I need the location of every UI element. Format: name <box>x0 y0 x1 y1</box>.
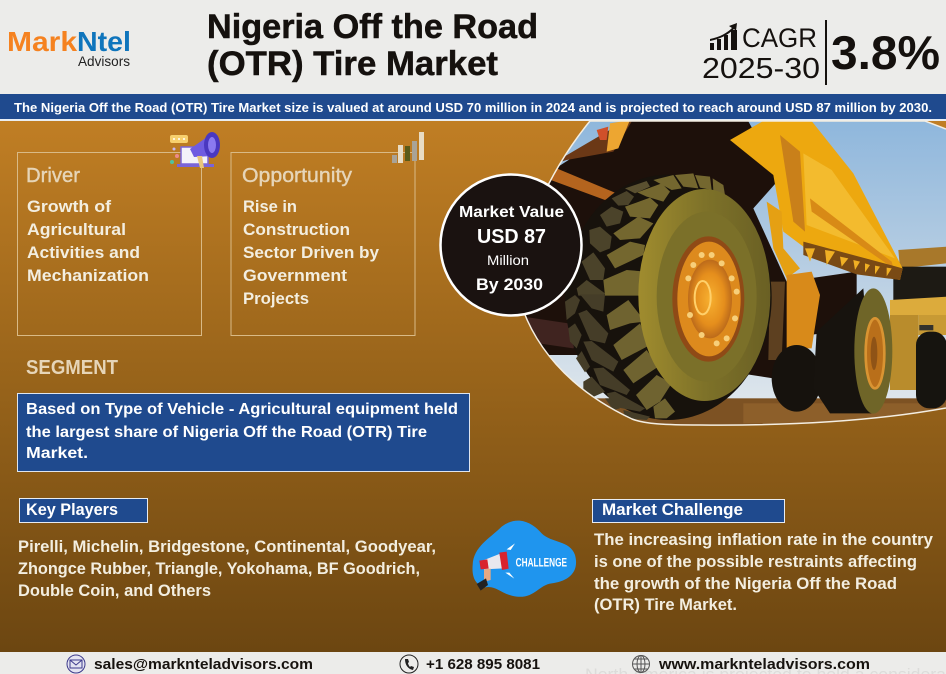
text: driver description: Activities and <box>27 243 140 262</box>
panel: driver <box>18 132 220 336</box>
logo <box>7 26 131 69</box>
logo: Ntel <box>77 26 131 57</box>
heading: segment: SEGMENT <box>26 357 118 379</box>
rear dual tire <box>813 288 892 414</box>
logo: Mark <box>7 26 77 57</box>
icon: rising bars <box>392 132 424 163</box>
text: opportunity description <box>243 197 380 308</box>
sidewall <box>638 189 770 401</box>
panel: key players <box>18 498 436 600</box>
wheel hub <box>672 236 744 362</box>
icon: challenge megaphone <box>472 521 576 597</box>
text: market challenge description <box>594 530 934 614</box>
text: key players list: Pirelli, Michelin, Bridgestone, Continental, Goodyear, <box>18 537 436 556</box>
text: market challenge description: The increasing inflation rate in the country <box>594 530 934 549</box>
text: email: sales@marknteladvisors.com <box>94 656 313 673</box>
summary banner <box>0 94 946 120</box>
icon: email <box>67 655 85 673</box>
title: Nigeria Off the Road <box>207 8 538 46</box>
text: opportunity description: Rise in <box>243 197 297 216</box>
icon: globe <box>632 656 650 672</box>
text: opportunity description: Projects <box>243 289 309 308</box>
text: driver description: Mechanization <box>27 266 149 285</box>
text: driver description: Growth of <box>27 197 111 216</box>
callout: market value: USD 87 <box>477 226 546 248</box>
heading: key players: Key Players <box>26 500 118 519</box>
text: opportunity description: Construction <box>243 220 350 239</box>
main background <box>0 121 946 652</box>
header band <box>0 0 946 95</box>
title: (OTR) Tire Market <box>207 45 498 83</box>
text: market challenge description: is one of the possible restraints affecting <box>594 552 917 571</box>
footer band <box>0 652 946 674</box>
CAGR block: 3.8% <box>831 26 940 79</box>
panel: opportunity <box>231 132 424 336</box>
callout: market value: Million <box>487 252 529 268</box>
heading: market challenge: Market Challenge <box>602 500 743 519</box>
tread blocks lower <box>565 294 675 420</box>
icon: challenge megaphone: CHALLENGE <box>516 556 567 570</box>
heading: opportunity: Opportunity <box>242 165 352 187</box>
panel: segment description: the largest share of Nigeria Off the Road (OTR) Tire <box>26 424 427 441</box>
text: website: www.marknteladvisors.com <box>658 656 870 673</box>
main tire <box>565 173 772 420</box>
text: key players list <box>18 537 436 600</box>
icon: megaphone and laptop <box>170 132 220 168</box>
photo: mining truck <box>510 115 946 432</box>
panel: segment description: Market. <box>26 445 88 462</box>
rear far tire <box>772 345 822 412</box>
panel: market challenge <box>592 500 934 614</box>
far truck <box>890 247 946 408</box>
callout: market value <box>440 174 582 316</box>
logo: Advisors <box>78 53 130 69</box>
panel: segment description: Based on Type of Vehicle - Agricultural equipment held <box>26 401 458 418</box>
text: key players list: Double Coin, and Others <box>18 581 211 600</box>
text: driver description <box>27 197 149 285</box>
text: market challenge description: (OTR) Tire Market. <box>594 595 737 614</box>
panel: segment description <box>18 394 470 472</box>
heading: market challenge <box>592 500 784 522</box>
text: phone: +1 628 895 8081 <box>426 656 540 673</box>
text: driver description: Agricultural <box>27 220 126 239</box>
support arm <box>767 202 800 278</box>
text: opportunity description: Government <box>243 266 347 285</box>
orange frame at left <box>552 168 615 200</box>
chassis dark <box>520 118 857 378</box>
text: opportunity description: Sector Driven by <box>243 243 380 262</box>
CAGR block: 2025-30 <box>702 53 820 85</box>
CAGR block: CAGR <box>742 23 817 53</box>
tread blocks upper <box>577 173 725 296</box>
callout: market value: By 2030 <box>476 275 543 294</box>
heading: key players <box>20 498 148 522</box>
text: market challenge description: the growth of the Nigeria Off the Road <box>594 574 897 593</box>
heading: driver: Driver <box>26 165 80 187</box>
icon: growth chart <box>710 23 737 50</box>
summary banner: The Nigeria Off the Road (OTR) Tire Market size is valued at around USD 70 million in 2024 and is projected to reach around USD 87 million by 2030. <box>14 100 932 115</box>
callout: market value: Market Value <box>459 204 564 221</box>
dump body <box>730 119 903 280</box>
title <box>207 8 538 83</box>
text: key players list: Zhongce Rubber, Triangle, Yokohama, BF Goodrich, <box>18 559 420 578</box>
icon: phone <box>400 655 418 673</box>
CAGR block <box>702 20 940 85</box>
